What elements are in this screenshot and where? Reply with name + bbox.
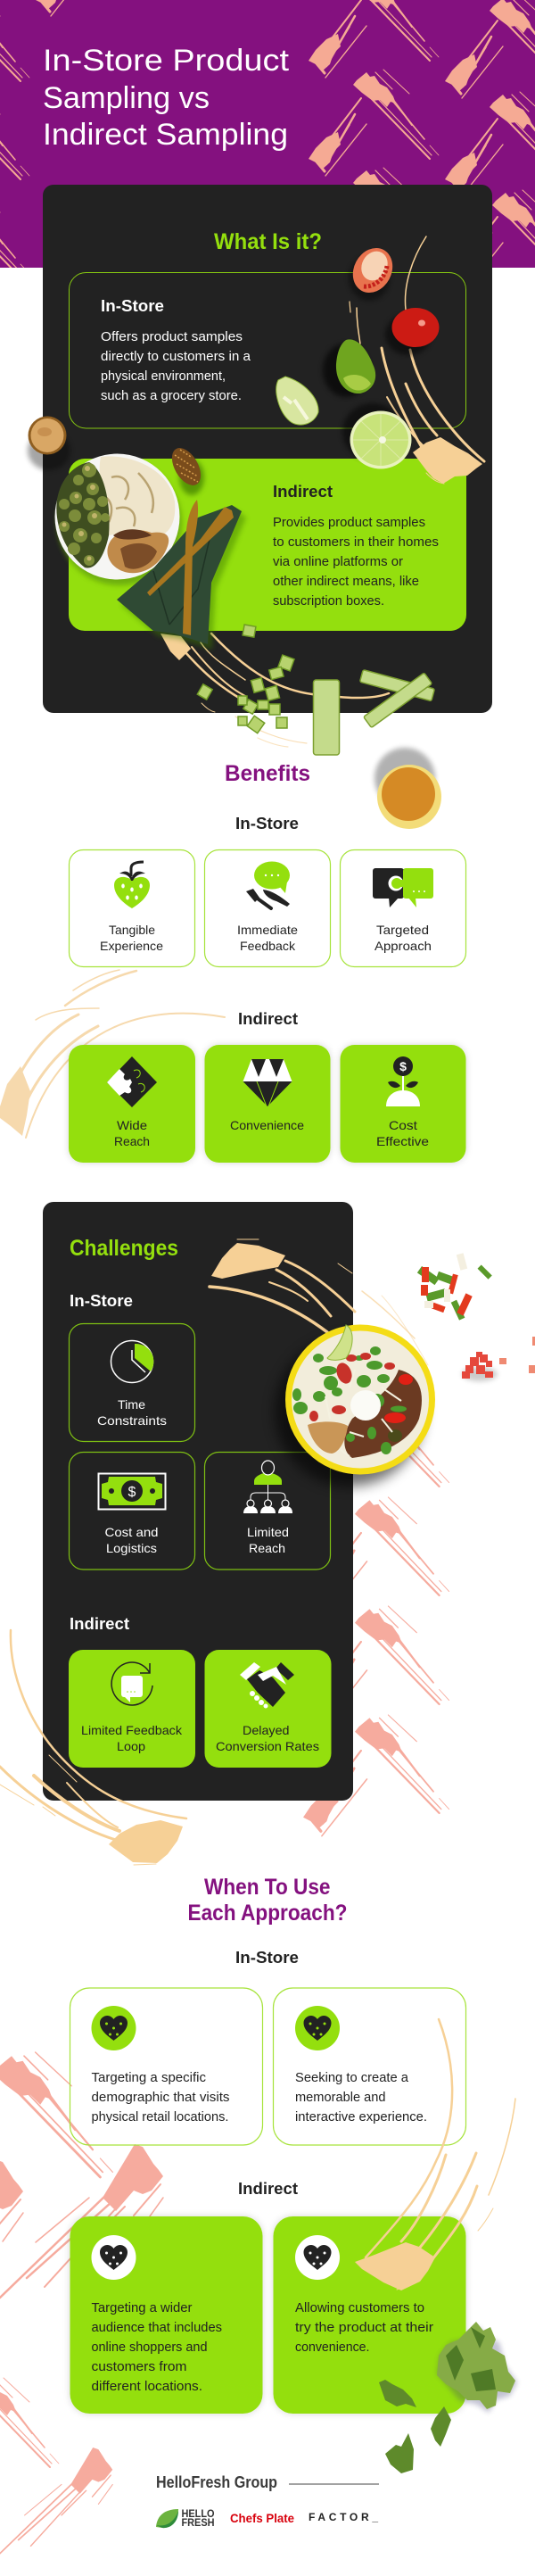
icon: heart badge (91, 2235, 136, 2280)
footer: HelloFresh Group (156, 2473, 379, 2529)
box: In-Store definition: In-Store (101, 297, 164, 315)
logo: Factor: FACTOR_ (309, 2511, 378, 2523)
food: dinner plate with sprouts, mash and patty (55, 453, 182, 585)
card: Tangible Experience: Tangible (109, 923, 155, 937)
box: In-Store definition (70, 273, 465, 428)
card: Tangible Experience (70, 849, 194, 967)
footer: HelloFresh Group: HelloFresh Group (156, 2473, 277, 2491)
heading: What Is it: What Is it? (214, 229, 322, 254)
heading: Benefits: Benefits (225, 761, 310, 786)
card: Targeting a specific demographic (70, 1988, 262, 2145)
box: Indirect definition: via online platforms or (273, 555, 403, 569)
icon: strawberry (114, 862, 150, 908)
card: Cost Effective: Cost (389, 1118, 417, 1132)
card: Limited Reach: Limited (247, 1525, 289, 1539)
card: Targeting a wider audience: Targeting a wider (91, 2301, 193, 2315)
tan brush strokes, right of use cases (355, 2019, 515, 2290)
subheading: Indirect benefits: Indirect (238, 1010, 298, 1028)
card: Limited Feedback Loop: Limited Feedback (81, 1723, 183, 1737)
logo: HelloFresh (156, 2509, 215, 2529)
icon: feedback loop (111, 1662, 152, 1705)
box: In-Store definition: physical environment, (101, 369, 226, 384)
card: Targeted Approach: Approach (374, 939, 432, 953)
card: Targeting a specific demographic: physical retail locations. (91, 2110, 228, 2125)
food: sauce cup (374, 748, 441, 829)
icon: diamond gem (243, 1059, 292, 1106)
card: Delayed Conversion Rates: Conversion Rates (216, 1739, 319, 1753)
food: cucumber pieces (197, 625, 434, 755)
title: In-Store Product (43, 44, 290, 78)
box: Indirect definition: to customers in their homes (273, 535, 439, 550)
panel: Challenges (43, 1202, 353, 1801)
card: Allowing customers to try at convenience (273, 2216, 465, 2414)
card: Limited Reach (205, 1453, 330, 1570)
icon: organisation tree (243, 1461, 292, 1513)
card: Wide Reach (69, 1045, 195, 1163)
subheading: In-Store challenges: In-Store (70, 1292, 133, 1310)
icon: banknote (98, 1474, 166, 1510)
card: Seeking a memorable experience (273, 1988, 465, 2145)
panel: What Is It (43, 185, 492, 713)
card: Targeting a wider audience: online shoppers and (91, 2340, 207, 2355)
food: lime half (323, 339, 375, 397)
tan brush strokes, challenges top (210, 1239, 428, 1365)
card: Convenience (205, 1045, 330, 1163)
card: Cost and Logistics: Logistics (106, 1541, 157, 1555)
food: cilantro (379, 2322, 517, 2473)
card: Allowing customers to try at convenience: Allowing customers to (295, 2301, 424, 2315)
logo: HelloFresh: HELLO (182, 2509, 215, 2520)
card: Seeking a memorable experience: interactive experience. (295, 2110, 427, 2125)
card: Cost Effective: Effective (376, 1134, 429, 1148)
icon: speech bubble with cutlery (246, 862, 290, 908)
background brush strokes, white section (0, 970, 449, 2554)
food: napkin with knife and fork (117, 500, 246, 650)
food: halved tomato (345, 241, 400, 301)
icon: heart badge (295, 2235, 340, 2280)
card: Delayed Conversion Rates: Delayed (243, 1723, 289, 1737)
box: Indirect definition: Indirect (273, 483, 333, 501)
box: In-Store definition: directly to customers in a (101, 350, 251, 364)
subheading: In-Store use cases: In-Store (235, 1949, 299, 1967)
card: Targeted Approach: Targeted (376, 923, 429, 937)
icon: banknote: $ (128, 1485, 136, 1500)
logo: HelloFresh: FRESH (182, 2518, 214, 2529)
card: Targeting a specific demographic: demographic that visits (91, 2091, 230, 2105)
card: Targeting a wider audience (70, 2216, 262, 2414)
logo: Chefs Plate: Chefs Plate (230, 2511, 294, 2525)
food: diced tomato (462, 1337, 535, 1381)
icon: handshake (240, 1662, 294, 1708)
card: Limited Feedback Loop (69, 1650, 195, 1768)
icon: money plant (386, 1056, 420, 1106)
food: lime wedge (276, 377, 318, 425)
card: Seeking a memorable experience: Seeking to create a (295, 2071, 409, 2085)
card: Tangible Experience: Experience (100, 939, 163, 953)
card: Time Constraints: Time (118, 1397, 145, 1412)
card: Allowing customers to try at convenience: convenience. (295, 2340, 369, 2355)
card: Immediate Feedback (205, 849, 330, 967)
box: Indirect definition: Provides product samples (273, 516, 425, 530)
tan brush strokes, challenges bottom (0, 1630, 186, 1865)
card: Time Constraints (70, 1324, 194, 1442)
food: lime slice (342, 403, 412, 469)
card: Convenience: Convenience (230, 1118, 304, 1132)
food: dip bowl (28, 416, 70, 470)
title: Indirect Sampling (43, 118, 288, 152)
box: Indirect definition (69, 459, 466, 631)
card: Immediate Feedback: Immediate (237, 923, 298, 937)
card: Allowing customers to try at convenience: try the product at their (295, 2321, 433, 2335)
card: Wide Reach: Reach (114, 1134, 150, 1148)
icon: puzzle diamond (107, 1056, 157, 1107)
icon: interlocking speech bubbles (373, 868, 433, 907)
card: Cost and Logistics: Cost and (105, 1525, 159, 1539)
card: Limited Feedback Loop: Loop (117, 1739, 145, 1753)
food: cherry tomato (385, 308, 439, 355)
card: Cost Effective (341, 1045, 465, 1163)
food: taco rice bowl (275, 1324, 435, 1487)
box: In-Store definition: such as a grocery store. (101, 389, 242, 403)
card: Targeting a specific demographic: Targeting a specific (91, 2071, 206, 2085)
tan brush strokes, below Indirect box (160, 634, 389, 747)
food: pine cone (166, 443, 207, 495)
icon: money plant: $ (399, 1059, 407, 1073)
card: Time Constraints: Constraints (97, 1413, 167, 1428)
card: Delayed Conversion Rates (205, 1650, 332, 1768)
title: Sampling vs (43, 81, 210, 115)
box: Indirect definition: subscription boxes. (273, 594, 384, 609)
heading: When To Use Each Approach: When To Use (204, 1875, 331, 1900)
header band with brush pattern (0, 0, 535, 294)
card: Immediate Feedback: Feedback (240, 939, 296, 953)
tan brush strokes, upper right (350, 236, 484, 484)
title (43, 44, 290, 152)
icon: heart badge (295, 2006, 340, 2050)
box: In-Store definition: Offers product samples (101, 330, 243, 344)
food: chopped peppers (417, 1253, 492, 1321)
card: Targeting a wider audience: customers from (91, 2360, 187, 2374)
card: Limited Reach: Reach (249, 1541, 285, 1555)
box: Indirect definition: other indirect means, like (273, 575, 419, 589)
icon: clock (111, 1340, 153, 1383)
heading: When To Use Each Approach (187, 1875, 348, 1926)
card: Seeking a memorable experience: memorable and (295, 2091, 385, 2105)
heading: Challenges: Challenges (70, 1236, 178, 1261)
card: Targeting a wider audience: audience that includes (91, 2321, 222, 2335)
subheading: Indirect challenges: Indirect (70, 1615, 129, 1633)
card: Wide Reach: Wide (117, 1118, 147, 1132)
heading: When To Use Each Approach: Each Approach? (187, 1901, 348, 1926)
card: Cost and Logistics (70, 1453, 194, 1570)
icon: heart badge (91, 2006, 136, 2050)
card: Targeting a wider audience: different locations. (91, 2380, 202, 2394)
card: Targeted Approach (341, 849, 465, 967)
subheading: Indirect use cases: Indirect (238, 2180, 298, 2198)
subheading: In-Store benefits: In-Store (235, 815, 299, 832)
